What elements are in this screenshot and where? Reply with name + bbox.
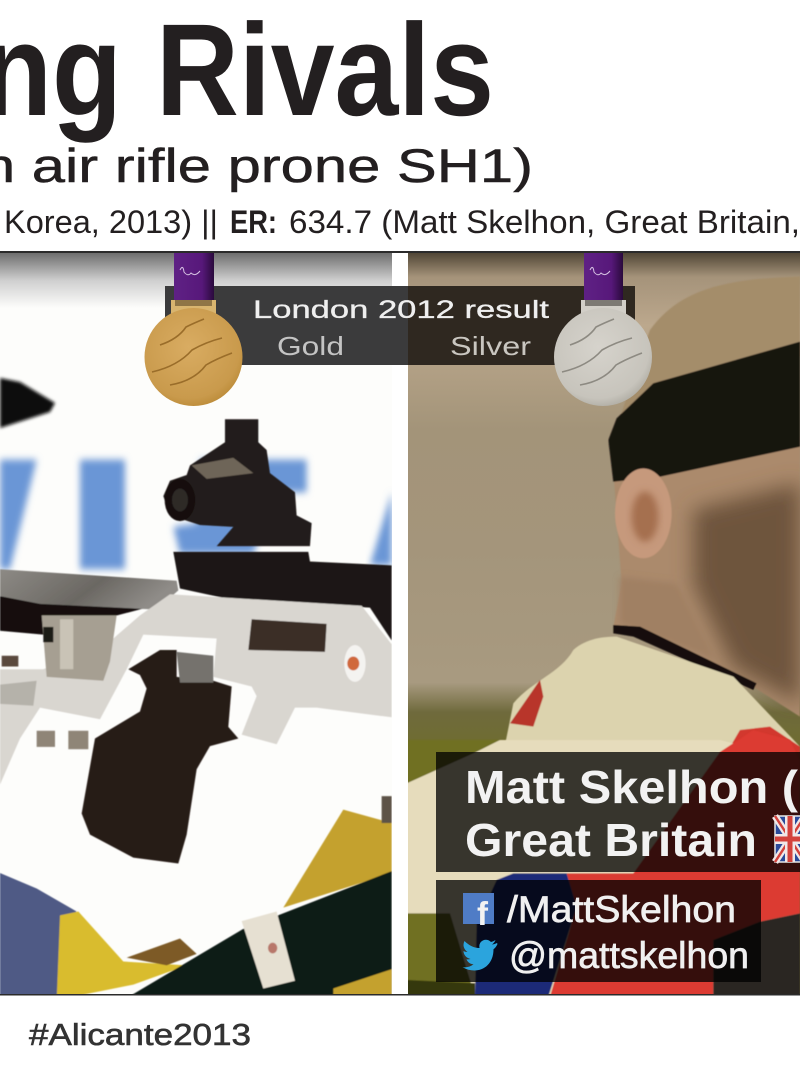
- rifle: [0, 419, 392, 1000]
- title: Rivals: [156, 0, 494, 143]
- athlete country: Great Britain: [465, 814, 757, 866]
- records line: ER:: [230, 204, 277, 240]
- athlete name: Matt Skelhon (: [465, 761, 799, 813]
- twitter handle: @mattskelhon: [509, 935, 749, 976]
- photo frame lines: [0, 251, 800, 996]
- hashtag: #Alicante2013: [29, 1017, 251, 1052]
- icon: facebook: [463, 893, 494, 932]
- icon: gold medal: [144, 253, 242, 406]
- silver label: Silver: [450, 331, 531, 361]
- icon: facebook: f: [477, 895, 489, 932]
- records line: [4, 204, 800, 240]
- icon: UK flag: [775, 816, 800, 862]
- result band: [165, 286, 635, 365]
- icon: twitter bird: [462, 940, 498, 970]
- athlete head and shoulder: [500, 277, 800, 770]
- facebook handle: /MattSkelhon: [507, 889, 736, 930]
- jersey under name panel: [407, 730, 800, 997]
- shooter cap brim: [0, 378, 55, 428]
- blurred blue sponsor letters: [0, 460, 392, 569]
- panel: right photo: [407, 251, 800, 997]
- records line: 634.7 (Matt Skelhon, Great Britain,: [289, 204, 800, 240]
- records line: Korea, 2013) ||: [4, 204, 218, 240]
- icon: silver medal: [554, 253, 652, 406]
- title: [0, 0, 494, 143]
- panel: left photo: [0, 251, 392, 1000]
- panel: athlete name: [436, 752, 800, 872]
- band heading: London 2012 result: [253, 296, 549, 324]
- panel: social links: [436, 880, 761, 982]
- gold label: Gold: [277, 331, 344, 361]
